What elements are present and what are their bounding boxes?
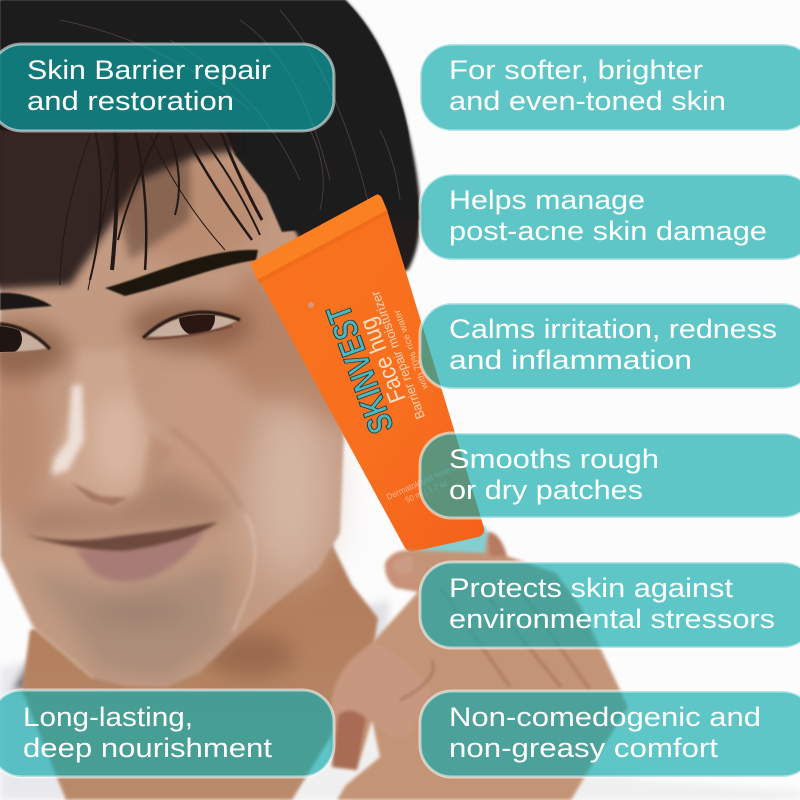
- panel: Calms irritation, redness and inflammation: [420, 303, 800, 389]
- mid cheek tone: [165, 370, 245, 490]
- panel: Smooths rough or dry patches: [420, 433, 800, 518]
- forehead tone: [115, 155, 265, 265]
- upper lip area: [20, 470, 235, 538]
- photo: face: [0, 130, 344, 687]
- photo: hair back: [0, 0, 420, 280]
- thumb tip: [385, 550, 420, 590]
- eye left: [0, 324, 50, 354]
- photo: tube cap: [410, 525, 500, 572]
- tube body: [250, 194, 484, 552]
- panel: Non-comedogenic and non-greasy comfort: [420, 691, 800, 777]
- photo: shirt: [0, 600, 800, 800]
- product name: Face hug: Face hug: [355, 314, 412, 407]
- panel: Helps manage post-acne skin damage: post-acne skin damage: [449, 216, 767, 246]
- right cheek highlight: [248, 400, 332, 580]
- panel: For softer, brighter and even-toned skin: [420, 44, 800, 131]
- panel: Long-lasting, deep nourishment: deep nourishment: [23, 733, 273, 763]
- curled finger: [332, 643, 432, 770]
- panel: Protects skin against environmental stressors: environmental stressors: [449, 604, 775, 634]
- photo: neck: [22, 540, 378, 800]
- product tube: [250, 194, 484, 552]
- panel: Long-lasting, deep nourishment: Long-lasting,: [23, 702, 193, 732]
- photo: hair fringe: [0, 0, 420, 290]
- product ingredient: with 70% rice water: [392, 308, 430, 392]
- finger creases: [440, 587, 590, 690]
- panel: Long-lasting, deep nourishment: [0, 690, 334, 777]
- eye right: [141, 309, 242, 340]
- eye socket right: [128, 299, 252, 351]
- panel: Helps manage post-acne skin damage: [420, 174, 800, 260]
- chin stubble dark: [90, 598, 190, 626]
- registered mark: [308, 302, 314, 308]
- jaw rim light: [0, 557, 93, 678]
- brand: SKINVEST: SKINVEST: [319, 299, 402, 439]
- tube crimp band: [250, 195, 387, 280]
- tube crimp shading: [257, 210, 388, 284]
- panel: Calms irritation, redness and inflammation: Calms irritation, redness: [449, 314, 777, 344]
- size note: 50 ml | 1.7 oz: [404, 477, 449, 505]
- left cheek: [0, 360, 47, 520]
- panel: Protects skin against environmental stressors: [420, 562, 800, 648]
- smile crease: [233, 515, 255, 632]
- eyebrow left: [0, 293, 52, 310]
- upper cheek shade: [200, 265, 344, 430]
- photo: hand: [332, 532, 628, 800]
- panel: Skin Barrier repair and restoration: Skin Barrier repair: [27, 55, 271, 85]
- panel: Protects skin against environmental stressors: Protects skin against: [449, 573, 734, 603]
- eye socket left: [0, 322, 68, 378]
- panel: For softer, brighter and even-toned skin: For softer, brighter: [449, 55, 703, 85]
- nose: [50, 350, 172, 506]
- panel: Skin Barrier repair and restoration: and restoration: [27, 86, 234, 116]
- panel: Helps manage post-acne skin damage: Helps manage: [449, 185, 645, 215]
- panel: Smooths rough or dry patches: Smooths rough: [449, 444, 659, 474]
- mouth: [25, 522, 218, 582]
- product descriptor: Barrier repair moisturizer: [367, 289, 428, 421]
- eyebrow right: [105, 250, 258, 296]
- panel: Calms irritation, redness and inflammation: and inflammation: [449, 345, 692, 375]
- panel: Non-comedogenic and non-greasy comfort: non-greasy comfort: [449, 733, 719, 763]
- panel: Non-comedogenic and non-greasy comfort: Non-comedogenic and: [449, 702, 761, 732]
- tested note: Dermatologist tested: [385, 462, 458, 502]
- chin stubble: [30, 560, 230, 682]
- panel: For softer, brighter and even-toned skin: and even-toned skin: [449, 86, 726, 116]
- panel: Smooths rough or dry patches: or dry patches: [449, 475, 643, 505]
- neck shadow: [205, 633, 295, 677]
- panel: Skin Barrier repair and restoration: [0, 44, 334, 131]
